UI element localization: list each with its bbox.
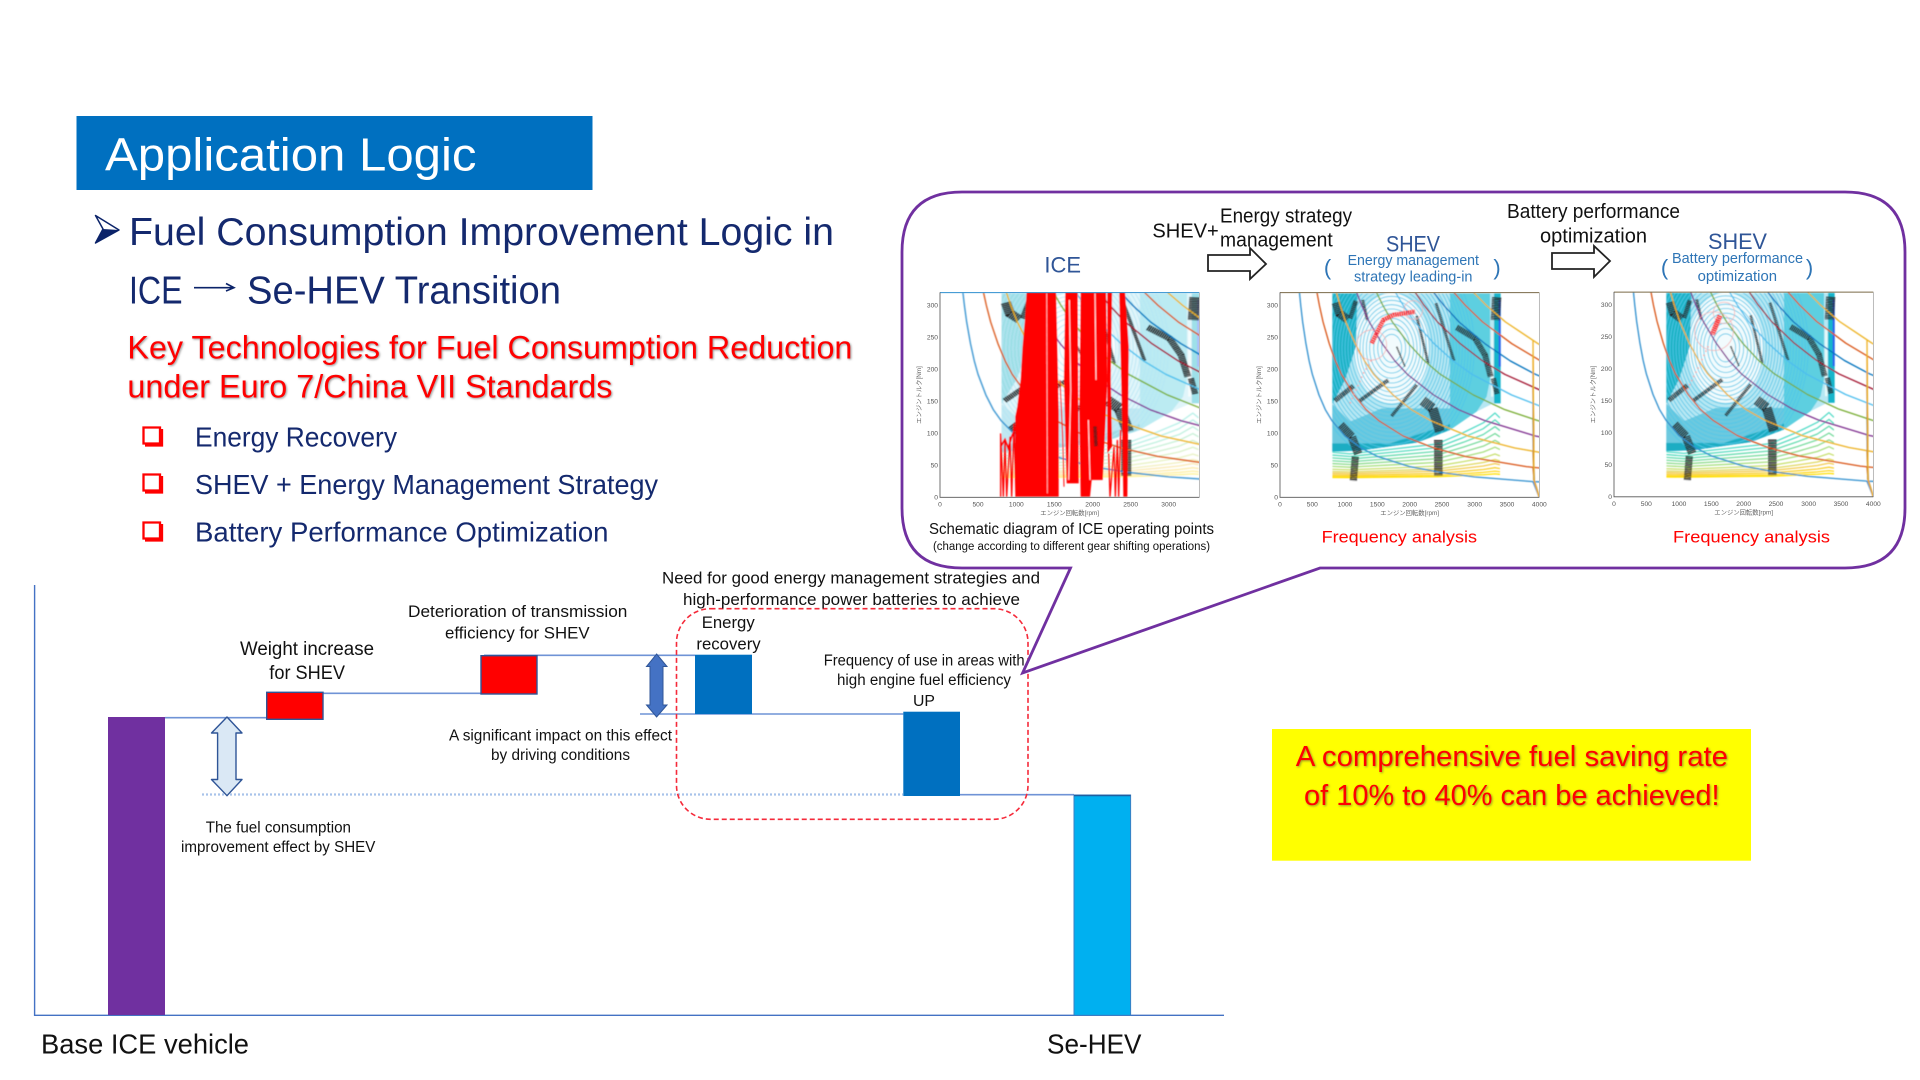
label: battery performance optimization: Battery performance (1507, 201, 1680, 223)
label: base ICE vehicle: Base ICE vehicle (41, 1028, 249, 1059)
heading: fuel consumption improvement logic: ICE (129, 269, 182, 312)
icon: arrow bullet (96, 216, 119, 243)
chart: SHEV operating map (1256, 292, 1546, 516)
axis tick labels: 0 (938, 502, 942, 509)
heading: SHEV energy management: strategy leading-in (1354, 270, 1472, 286)
dashed highlight region (676, 609, 1028, 819)
axis tick labels (915, 302, 1176, 517)
operating points in red (1001, 292, 1129, 497)
bar: high efficiency area use (903, 712, 960, 796)
heading: SHEV energy management (1324, 232, 1501, 286)
heading: fuel consumption improvement logic (96, 211, 834, 312)
waterfall chart: fuel consumption (35, 568, 1224, 1059)
bullet list: key technologies: SHEV + Energy Management Strategy (195, 469, 658, 500)
label: energy strategies requirement: high-performance power batteries to achieve (683, 590, 1020, 609)
label: transmission deterioration: Deterioration of transmission (408, 602, 627, 621)
callout: purple speech bubble (902, 192, 1905, 673)
label: battery performance optimization (1507, 201, 1680, 248)
bar: base ICE vehicle (108, 717, 165, 1015)
label: SHEV plus energy strategy: Energy strategy (1220, 206, 1352, 228)
label: Se-HEV: Se-HEV (1047, 1028, 1142, 1059)
label: SHEV improvement effect: improvement effect by SHEV (181, 839, 376, 856)
label: weight increase: Weight increase (240, 639, 374, 660)
panel: SHEV battery optimization (1590, 234, 1880, 546)
panel: SHEV energy management (1256, 236, 1818, 546)
label: energy strategies requirement (662, 568, 1040, 609)
chart top border (1280, 291, 1539, 294)
chart top border (1614, 291, 1873, 294)
label: frequency of use: high engine fuel efficiency (837, 672, 1011, 689)
caption: schematic diagram: (change according to different gear shifting operations) (933, 541, 1210, 553)
bar: weight increase (267, 692, 323, 719)
heading: fuel consumption improvement logic: Se-HEV Transition (247, 269, 561, 312)
caption: frequency analysis: Frequency analysis (1322, 528, 1477, 547)
label: battery performance optimization: optimization (1540, 226, 1647, 248)
heading: SHEV battery performance: Battery performance (1672, 251, 1803, 267)
label: energy recovery: Energy (702, 613, 755, 632)
arrow: ICE to SHEV (1208, 248, 1266, 279)
axis tick labels: 2000 (1085, 502, 1100, 509)
axis tick labels: 2500 (1123, 502, 1138, 509)
heading: fuel consumption improvement logic: Fuel Consumption Improvement Logic in (129, 211, 834, 254)
label: SHEV improvement effect (181, 820, 376, 856)
connector lines (165, 655, 1074, 795)
icon: checkbox bullet (144, 522, 162, 540)
label: frequency of use (824, 653, 1025, 710)
label: weight increase (240, 639, 374, 684)
heading: SHEV energy management: Energy management (1348, 253, 1479, 269)
caption: frequency analysis: Frequency analysis (1673, 528, 1830, 547)
heading: SHEV battery performance (1661, 229, 1813, 285)
arrow: SHEV to optimized SHEV (1552, 246, 1610, 277)
axis tick labels: 3000 (1161, 502, 1176, 509)
red subheading: key technologies: under Euro 7/China VII Standards (127, 368, 612, 404)
label: SHEV improvement effect: The fuel consumption (206, 820, 351, 837)
caption: schematic diagram: Schematic diagram of ICE operating points (929, 521, 1214, 538)
label: frequency of use: Frequency of use in areas with (824, 653, 1025, 670)
axis tick labels (1255, 302, 1547, 517)
axis tick labels: 500 (972, 502, 984, 509)
panel: ICE operating points (915, 236, 1920, 553)
chart top border (940, 291, 1199, 294)
heading: SHEV energy management: ( (1324, 255, 1332, 280)
heading: SHEV battery performance: ) (1806, 255, 1813, 280)
dotted target line (202, 793, 903, 796)
heading: SHEV energy management: ) (1493, 255, 1501, 280)
chart axes (35, 585, 1224, 1015)
red subheading: key technologies: Key Technologies for Fuel Consumption Reduction (127, 329, 852, 365)
bullet list: key technologies (144, 422, 658, 547)
double arrow: driving conditions effect (646, 654, 667, 717)
icon: checkbox bullet (144, 474, 162, 492)
label: energy recovery: recovery (696, 634, 761, 653)
double arrow: SHEV improvement (212, 717, 242, 796)
heading: ICE: ICE (1044, 253, 1081, 278)
heading: SHEV battery performance: SHEV (1708, 229, 1767, 254)
bullet list: key technologies: Energy Recovery (195, 422, 397, 453)
callout: fuel saving rate: A comprehensive fuel saving rate (1296, 741, 1728, 773)
bar: energy recovery (695, 655, 752, 714)
axis tick labels: 1500 (1047, 502, 1062, 509)
caption: schematic diagram (929, 521, 1214, 553)
label: transmission deterioration (408, 602, 627, 643)
callout: fuel saving rate: of 10% to 40% can be achieved! (1304, 780, 1720, 812)
label: weight increase: for SHEV (269, 663, 345, 684)
icon: checkbox bullet (144, 428, 162, 446)
label: SHEV plus energy strategy (1152, 206, 1352, 252)
axis tick labels (1589, 302, 1881, 516)
title banner: Application Logic (105, 128, 476, 180)
heading: SHEV energy management: SHEV (1386, 232, 1440, 257)
bar: transmission deterioration (481, 656, 537, 694)
title banner (76, 116, 592, 190)
callout: fuel saving rate (1272, 729, 1751, 861)
axis tick labels: 1000 (1009, 502, 1024, 509)
label: frequency of use: UP (913, 693, 935, 710)
red subheading: key technologies (127, 329, 852, 404)
label: energy recovery (696, 613, 761, 653)
label: transmission deterioration: efficiency for SHEV (445, 624, 590, 643)
bullet list: key technologies: Battery Performance Optimization (195, 516, 608, 547)
label: driving conditions (449, 727, 673, 764)
chart: optimized SHEV operating map (1590, 292, 1880, 516)
bar: Se-HEV (1074, 795, 1131, 1015)
label: driving conditions: by driving conditions (491, 747, 630, 764)
label: driving conditions: A significant impact on this effect (449, 727, 673, 744)
heading: SHEV battery performance: ( (1661, 255, 1669, 280)
label: energy strategies requirement: Need for good energy management strategies and (662, 568, 1040, 587)
label: SHEV plus energy strategy: management (1220, 230, 1333, 252)
operating points in red (1350, 301, 1423, 403)
heading: SHEV battery performance: optimization (1698, 269, 1777, 285)
label: SHEV plus energy strategy: SHEV+ (1152, 221, 1219, 243)
operating points in red (1687, 302, 1735, 389)
chart: ICE operating map (916, 292, 1840, 516)
